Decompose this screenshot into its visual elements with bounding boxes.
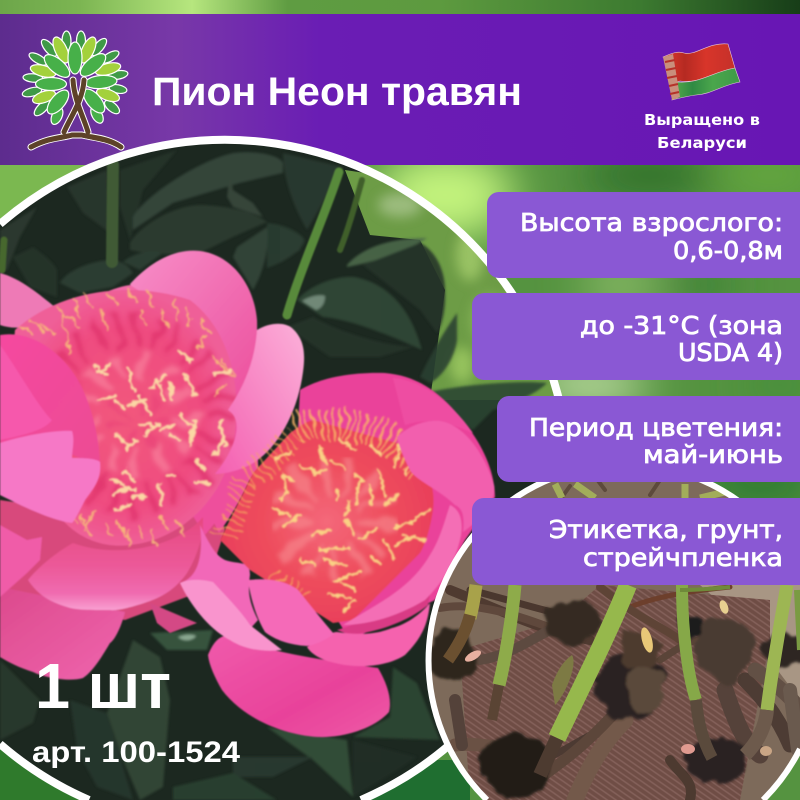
callout: hardiness (472, 293, 800, 380)
purple header band (0, 14, 800, 165)
origin caption: Выращено в (644, 111, 760, 129)
leaves (21, 31, 129, 126)
tan soil right (700, 585, 800, 700)
left pale lower petal (0, 431, 100, 523)
callout: bloom period: май-июнь (643, 440, 783, 469)
title: Пион Неон травян (152, 70, 522, 114)
ruffled inner petals (50, 330, 220, 500)
callout: bloom period: Период цветения: (529, 413, 783, 442)
photo content (0, 130, 570, 800)
coral centre (14, 290, 237, 546)
dark tubers (428, 600, 800, 797)
back petals (297, 373, 495, 640)
pink-brown mat (460, 585, 770, 800)
left magenta petal (0, 334, 100, 467)
bottom petal (208, 636, 390, 737)
lower petals (0, 517, 203, 680)
origin caption: Беларуси (657, 134, 747, 152)
front right petal (343, 505, 462, 625)
white ring (429, 464, 800, 800)
foliage leaves (0, 150, 547, 800)
lower left base (184, 526, 259, 628)
callout: hardiness: до -31°C (зона (580, 311, 783, 340)
icon: Belarus flag (663, 44, 740, 100)
trunk (31, 80, 121, 147)
white ring (0, 140, 569, 800)
callout: height: Высота взрослого: (520, 208, 783, 237)
main photo circle: pink peonies (0, 130, 570, 800)
middle lower petal (248, 579, 334, 646)
peony flower, left (0, 251, 304, 680)
callout: package contents (472, 498, 800, 585)
thin roots (440, 470, 800, 800)
right inner petal (397, 421, 494, 532)
logo: tree (21, 31, 129, 147)
stamens: yellow tufts (275, 440, 430, 610)
callout: height (487, 192, 800, 278)
base mass filling the gaps between petals (0, 499, 226, 621)
stamens: thin orange (20, 290, 235, 545)
peony flower, right (180, 373, 495, 737)
inner petals texture (290, 475, 380, 565)
garden background (345, 170, 570, 400)
callout: package contents: стрейчпленка (583, 543, 783, 572)
green stems (448, 484, 800, 775)
sprout tips (463, 599, 772, 756)
coral centre (220, 420, 434, 623)
roots photo circle (426, 464, 800, 800)
callout: bloom period (497, 396, 800, 482)
article number: арт. 100-1524 (32, 736, 240, 769)
right pale petal (215, 324, 304, 474)
origin caption (644, 111, 760, 152)
dark crease band (336, 596, 430, 634)
quantity label: 1 шт (35, 650, 171, 722)
stamens: thin orange (225, 423, 425, 600)
green stems (2, 165, 362, 315)
stamens: cream tips (95, 350, 230, 510)
callout: package contents: Этикетка, грунт, (549, 515, 783, 544)
pale left petal (180, 580, 282, 651)
callout: height: 0,6-0,8м (673, 236, 783, 265)
callout: hardiness: USDA 4) (678, 338, 783, 367)
photo content (426, 465, 800, 800)
lower front petal (307, 603, 430, 666)
back petals (0, 251, 257, 533)
